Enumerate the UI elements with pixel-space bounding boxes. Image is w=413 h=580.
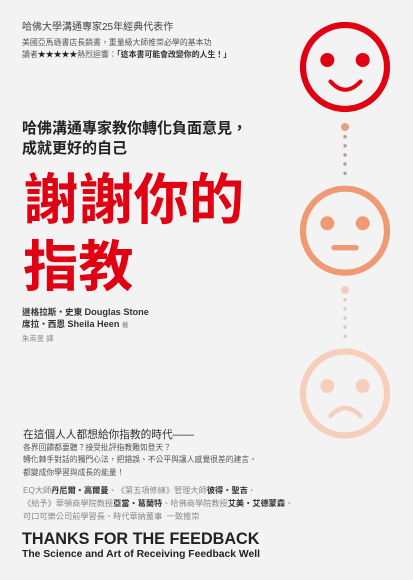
authors <box>22 307 149 329</box>
authors: 席拉・西恩 Sheila Heen 著 <box>22 319 128 329</box>
subtitle <box>22 120 247 157</box>
translator: 朱崇旻 譯 <box>22 334 54 343</box>
endorsers: 《給予》華頓商學院教授亞當・葛蘭特、哈佛商學院教授艾美・艾德蒙森、 <box>23 499 293 508</box>
main title: 指教 <box>23 236 134 298</box>
endorsement lines <box>22 38 231 59</box>
main title: 謝謝你的 <box>23 169 244 231</box>
endorsers <box>23 486 293 521</box>
icon: neutral face <box>303 189 387 273</box>
subtitle: 成就更好的自己 <box>22 140 127 157</box>
main title <box>23 169 244 298</box>
description: 各界回饋都要聽？接受批評指教難如登天？ <box>23 443 171 452</box>
description: 轉化棘手對話的獨門心法，把錯誤、不公平與讓人感覺很差的建言， <box>23 455 257 464</box>
endorsers: EQ大師丹尼爾・高爾曼、《第五項修練》管理大師彼得・聖吉、 <box>23 486 256 495</box>
dotted connector: happy to neutral <box>341 123 349 175</box>
section heading: 在這個人人都想給你指教的時代—— <box>23 429 194 441</box>
icon: sad face <box>303 352 387 436</box>
endorsement lines: 讀者★★★★★熱烈迴響：「這本書可能會改變你的人生！」 <box>22 50 231 59</box>
series tagline: 哈佛大學溝通專家25年經典代表作 <box>22 22 173 33</box>
endorsement lines: 美國亞馬遜書店長銷書，重量級大師推崇必學的基本功 <box>22 38 211 47</box>
subtitle: 哈佛溝通專家教你轉化負面意見， <box>22 120 247 137</box>
description <box>23 443 257 477</box>
english subtitle: The Science and Art of Receiving Feedback Well <box>22 549 260 560</box>
description: 都變成你學習與成長的能量！ <box>23 468 124 477</box>
icon: happy face <box>303 25 387 109</box>
dotted connector: neutral to sad <box>341 286 349 338</box>
authors: 道格拉斯・史東 Douglas Stone <box>22 307 149 317</box>
endorsers: 可口可樂公司前學習長、時代華納董事 一致推崇 <box>23 512 200 521</box>
english title: THANKS FOR THE FEEDBACK <box>22 530 259 548</box>
